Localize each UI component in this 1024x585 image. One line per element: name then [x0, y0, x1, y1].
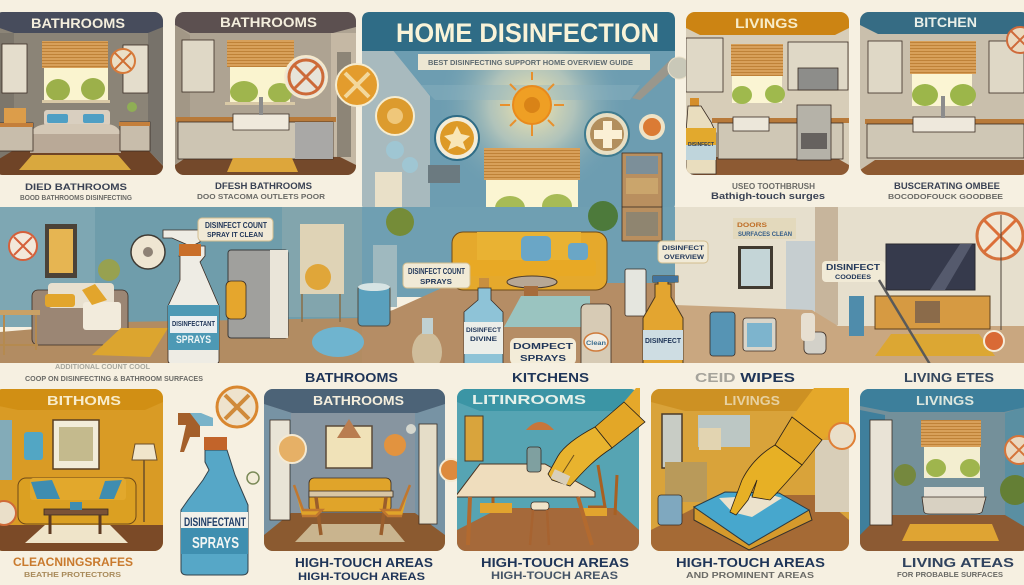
callout: disinfect sprays: DISINFECT COUNT	[408, 267, 465, 276]
framed art	[53, 420, 99, 469]
caption: panel 4	[888, 181, 1003, 201]
callout: disinfect sprays floor: SPRAYS	[520, 354, 567, 363]
floor lamp	[132, 444, 157, 522]
icon: orange link badge	[440, 459, 462, 481]
callout: disinfect sprays floor	[510, 338, 576, 365]
caption: high-touch areas 3: HIGH-TOUCH AREAS	[676, 555, 825, 570]
label strip: ADDITIONAL COUNT COOL	[55, 364, 151, 371]
caption: high-touch areas 1: HIGH-TOUCH AREAS	[295, 555, 433, 570]
wall art: framed poster	[738, 246, 773, 289]
heading: bathrooms: BATHROOMS	[313, 393, 404, 408]
callout: disinfect note: OVERVIEW	[664, 255, 704, 261]
bottle: blue disinfectant: DISINFECT	[466, 328, 501, 334]
rug: left	[92, 328, 168, 357]
heading: litinrooms: LITINROOMS	[472, 392, 586, 407]
callout: disinfect note: DISINFECT	[662, 246, 704, 252]
framed art	[662, 414, 682, 468]
plant: centre	[386, 208, 414, 236]
bottle: disinfectant sprays: SPRAYS	[192, 535, 239, 552]
icon: prohibited left	[9, 232, 37, 260]
caption: high-touch areas 2: HIGH-TOUCH AREAS	[491, 570, 618, 582]
caption: panel 3	[711, 182, 825, 201]
label strip: BATHROOMS	[305, 370, 398, 385]
upper cabinet	[182, 40, 214, 92]
heading: livings: LIVINGS	[916, 393, 974, 408]
bottle: disinfectant sprays	[178, 413, 248, 575]
window with blinds	[484, 148, 580, 207]
nightstands	[0, 102, 150, 151]
counter and sink	[865, 96, 1024, 158]
glove: wiping cloth	[730, 388, 849, 515]
left room	[0, 207, 362, 363]
callout: disinfect note	[658, 241, 708, 263]
sofa	[18, 478, 136, 524]
canister: Clean	[586, 341, 606, 347]
bottle: blue disinfectant	[464, 278, 503, 372]
callout: disinfect sprays	[403, 263, 470, 288]
coffee table	[44, 502, 108, 534]
spray bottle: left	[163, 230, 219, 364]
window with blinds	[731, 44, 785, 104]
cabinets	[2, 44, 148, 93]
bottle: yellow pump: DISINFECT	[645, 338, 682, 345]
heading: livings: LIVINGS	[724, 393, 780, 408]
doors	[270, 420, 437, 524]
callout: disinfectant spray: DISINFECT COUNT	[205, 221, 267, 230]
rug	[19, 155, 131, 170]
panel: central hero room	[362, 10, 675, 220]
label strip: COOP ON DISINFECTING & BATHROOM SURFACES	[25, 376, 203, 383]
subtitle band: BEST DISINFECTING SUPPORT HOME OVERVIEW GUIDE	[428, 60, 633, 67]
icon: small badge	[829, 423, 855, 449]
caption: panel 3: Bathigh-touch surges	[711, 191, 825, 201]
bath rug	[902, 524, 999, 541]
rug: right	[875, 334, 995, 356]
icon: big prohibited	[977, 213, 1023, 330]
panel: kitchen sink	[175, 12, 356, 175]
panel: teal dining with glove	[455, 389, 639, 551]
heading: livings: LIVINGS	[735, 16, 798, 31]
icon: no germs	[111, 49, 135, 73]
badges on wall	[278, 424, 416, 463]
caption: panel 2	[197, 181, 325, 201]
wall thermostat	[24, 432, 43, 460]
wall notes	[698, 415, 750, 450]
caption: panel 2: DOO STACOMA OUTLETS POOR	[197, 194, 325, 201]
pendant lamp	[526, 422, 554, 430]
bookshelf	[622, 153, 662, 213]
panel: orange room with cloth	[651, 389, 849, 551]
refrigerator	[226, 250, 288, 338]
caption: cleaning sprays	[13, 555, 133, 579]
stool	[530, 502, 549, 545]
window with blinds	[42, 41, 110, 103]
waste bin	[658, 495, 682, 525]
shelf: centre lower	[622, 207, 662, 241]
bathtub	[922, 487, 986, 514]
callout: disinfectant spray	[198, 218, 273, 241]
chairs	[478, 465, 617, 516]
canister	[581, 304, 611, 370]
coffee table	[507, 276, 557, 310]
caption: cleaning sprays: CLEACNINGSRAFES	[13, 555, 133, 569]
caption: high-touch areas 1: HIGH-TOUCH AREAS	[298, 571, 425, 583]
label strip	[0, 363, 1024, 387]
counter and sink	[176, 97, 336, 159]
caption: living areas	[897, 555, 1014, 579]
cup	[527, 447, 541, 472]
caption: cleaning sprays: BEATHE PROTECTORS	[24, 572, 121, 579]
icon: hatch badge	[0, 501, 16, 525]
caption: panel 1: DIED BATHROOMS	[25, 182, 127, 192]
heading: bathrooms: BATHROOMS	[31, 16, 125, 31]
callout: disinfect sprays: SPRAYS	[420, 279, 452, 286]
heading: bitchen: BITCHEN	[914, 15, 977, 30]
shelf items	[665, 462, 707, 502]
left-wall door and shelf	[375, 141, 460, 212]
sun	[500, 72, 564, 136]
plant: right of sofa	[588, 201, 618, 231]
callout: wall tag	[733, 218, 796, 239]
wrench pointer	[632, 57, 690, 100]
icon: round badges on centre wall	[336, 64, 665, 160]
icon: round ring	[247, 472, 259, 484]
blue vase	[849, 296, 864, 336]
window left	[0, 420, 12, 480]
caption: living areas: FOR PROBABLE SURFACES	[897, 572, 1003, 579]
wall art: yellow poster	[45, 224, 77, 278]
glove: wiping table	[548, 388, 645, 486]
wipes and containers	[710, 312, 826, 356]
caption: panel 1	[20, 182, 133, 202]
caption: high-touch areas 2: HIGH-TOUCH AREAS	[481, 555, 629, 570]
panel: blue bath room	[860, 389, 1024, 551]
wall poster with gold circle	[300, 224, 344, 322]
counter, sink and stove	[712, 105, 849, 160]
dining table and chairs	[294, 485, 410, 535]
caption: panel 4: BUSCERATING OMBEE	[894, 181, 1000, 191]
cloth stack	[694, 492, 812, 550]
icon: prohibited	[285, 56, 327, 98]
window with blinds	[921, 420, 981, 478]
bottle: DISINFECT	[688, 142, 714, 148]
bottle: yellow pump	[643, 276, 683, 378]
pendant lamp	[337, 419, 361, 438]
pole pointer	[879, 280, 931, 366]
caption: high-touch areas 3: AND PROMINENT AREAS	[686, 571, 815, 580]
title: HOME DISINFECTION	[396, 18, 659, 48]
panel: kitchen right	[860, 12, 1024, 175]
callout: disinfect tv	[822, 261, 885, 282]
label strip: CEID WIPES	[695, 370, 795, 385]
callout: wall tag: DOORS	[737, 223, 767, 229]
subtitle band	[418, 54, 650, 70]
round mat	[312, 327, 364, 357]
sofa: centre	[452, 232, 607, 290]
caption: panel 3: USEO TOOTHBRUSH	[732, 182, 815, 191]
tv stand	[875, 296, 990, 329]
waste bin	[358, 245, 397, 326]
window with blinds	[225, 40, 295, 105]
heading: rithoms: BITHOMS	[47, 393, 121, 408]
bed	[30, 110, 121, 153]
icon: prohibited	[1005, 436, 1024, 464]
spray bottle: left: SPRAYS	[176, 334, 211, 346]
window with blinds	[910, 41, 976, 106]
side table	[0, 310, 40, 355]
callout: disinfect tv: DISINFECT	[826, 263, 880, 272]
glass bottle	[412, 318, 442, 372]
caption: panel 1: BOOD BATHROOMS DISINFECTING	[20, 195, 133, 202]
caption: living areas: LIVING ATEAS	[902, 555, 1014, 570]
panel: yellow living room	[0, 389, 163, 551]
rug: teal striped	[504, 296, 590, 327]
panel: kitchen with bottle	[686, 12, 849, 175]
bench sofa	[309, 478, 391, 512]
sofa: left	[32, 283, 128, 345]
heading: bathrooms: BATHROOMS	[220, 15, 317, 30]
dining table	[455, 464, 595, 545]
centre room	[362, 207, 675, 363]
wall clock	[131, 235, 165, 269]
bottle: blue disinfectant: DIVINE	[470, 337, 497, 343]
bottle	[686, 98, 716, 174]
panel: bedroom top-left	[0, 12, 163, 175]
caption: high-touch areas 2	[481, 555, 629, 582]
icon: cross badge on bottle	[217, 387, 257, 427]
framed art	[465, 416, 483, 461]
waste bin white	[625, 269, 646, 316]
caption: high-touch areas 1	[295, 555, 433, 583]
caption: panel 4: BOCODOFOUCK GOODBEE	[888, 194, 1003, 201]
callout: disinfect sprays floor: DOMPECT	[513, 342, 573, 351]
callout: disinfect tv: COODEES	[835, 275, 871, 281]
right room	[675, 207, 1024, 363]
label strip: KITCHENS	[512, 370, 589, 385]
bottle: disinfectant sprays: DISINFECTANT	[184, 515, 246, 529]
framed map	[326, 426, 372, 468]
upper cabinets	[868, 41, 1024, 93]
panel: dining slate	[264, 389, 445, 551]
title banner	[362, 12, 675, 51]
caption: panel 2: DFESH BATHROOMS	[215, 181, 312, 191]
callout: disinfectant spray: SPRAY IT CLEAN	[207, 232, 263, 239]
plants	[894, 464, 1024, 505]
caption: high-touch areas 3	[676, 555, 825, 580]
label strip: LIVING ETES	[904, 370, 994, 385]
rug	[227, 158, 298, 172]
callout: wall tag: SURFACES CLEAN	[738, 232, 792, 238]
icon: small badge right	[984, 331, 1004, 351]
door	[870, 420, 892, 525]
upper cabinets and microwave	[686, 38, 848, 92]
television	[886, 244, 975, 290]
panel: wide middle scene	[0, 207, 1024, 363]
plant	[98, 259, 120, 281]
spray bottle: left: DISINFECTANT	[172, 321, 216, 328]
icon: prohibited	[1007, 27, 1024, 53]
